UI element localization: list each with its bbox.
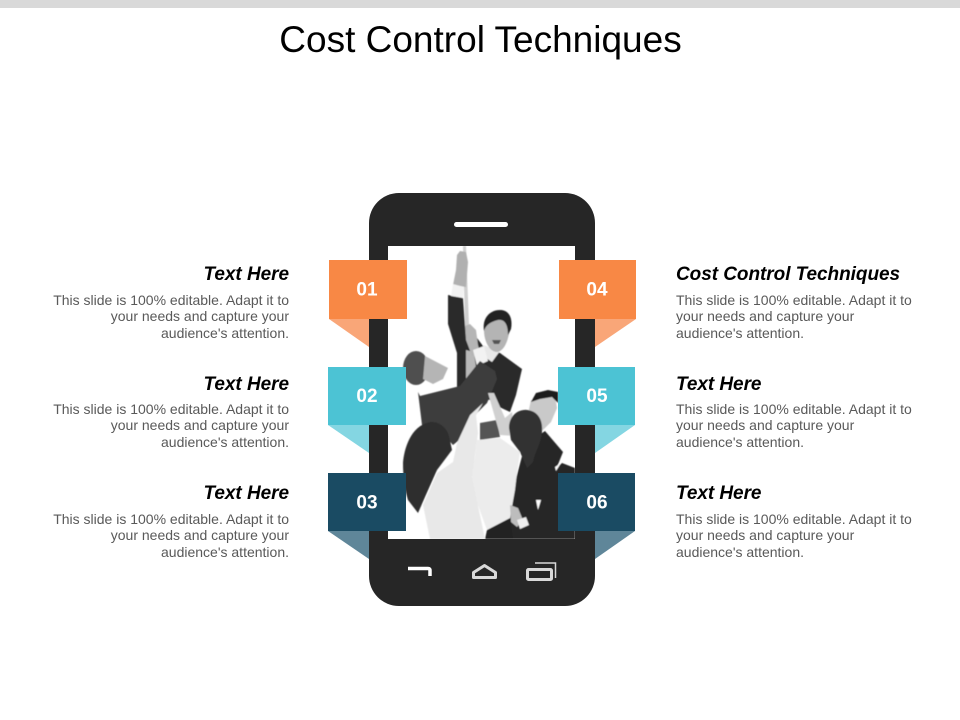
icon: home button	[474, 566, 496, 578]
text block 3: your needs and capture your	[111, 527, 289, 543]
text block 4: Cost Control Techniques	[676, 264, 900, 285]
text block 5: audience's attention.	[676, 434, 804, 450]
text block 6	[676, 483, 912, 560]
text block 2: your needs and capture your	[111, 417, 289, 433]
tab 04	[559, 260, 636, 347]
icon: recent apps button	[528, 563, 556, 580]
tab 04: 04	[586, 280, 608, 300]
text block 3	[53, 483, 289, 560]
text block 6: This slide is 100% editable. Adapt it to	[676, 510, 912, 526]
text block 1: This slide is 100% editable. Adapt it to	[53, 292, 289, 308]
title: Cost Control Techniques	[279, 19, 682, 60]
text block 4: This slide is 100% editable. Adapt it to	[676, 292, 912, 308]
text block 4: your needs and capture your	[676, 308, 854, 324]
text block 6: your needs and capture your	[676, 527, 854, 543]
text block 2: Text Here	[204, 374, 289, 395]
tab 06	[558, 473, 635, 559]
text block 3: Text Here	[204, 483, 289, 504]
top bar	[0, 0, 960, 8]
tab 02	[328, 367, 406, 453]
text block 5: This slide is 100% editable. Adapt it to	[676, 400, 912, 416]
tab 01: 01	[356, 280, 378, 300]
icon: back button	[408, 568, 430, 576]
text block 6: audience's attention.	[676, 544, 804, 560]
icon: speaker slot	[454, 222, 508, 227]
phone body	[369, 193, 595, 606]
text block 1	[53, 264, 289, 340]
tab 02: 02	[356, 386, 378, 407]
text block 2: audience's attention.	[161, 434, 289, 450]
text block 4	[676, 264, 912, 340]
text block 2: This slide is 100% editable. Adapt it to	[53, 400, 289, 416]
text block 5: your needs and capture your	[676, 417, 854, 433]
text block 1: audience's attention.	[161, 324, 289, 340]
text block 4: audience's attention.	[676, 324, 804, 340]
photo: business team climbing a rope	[403, 246, 575, 539]
text block 5: Text Here	[676, 374, 761, 395]
tab 06: 06	[586, 492, 608, 514]
tab 05: 05	[586, 386, 608, 407]
text block 5	[676, 374, 912, 450]
tab 01	[329, 260, 407, 347]
phone illustration with numbered tabs	[328, 193, 636, 606]
text block 3: This slide is 100% editable. Adapt it to	[53, 510, 289, 526]
text block 3: audience's attention.	[161, 544, 289, 560]
text block 6: Text Here	[676, 483, 761, 504]
text block 2	[53, 374, 289, 450]
tab 03	[328, 473, 406, 559]
text block 1: your needs and capture your	[111, 308, 289, 324]
tab 03: 03	[356, 492, 378, 514]
tab 05	[558, 367, 635, 453]
text block 1: Text Here	[204, 264, 289, 285]
